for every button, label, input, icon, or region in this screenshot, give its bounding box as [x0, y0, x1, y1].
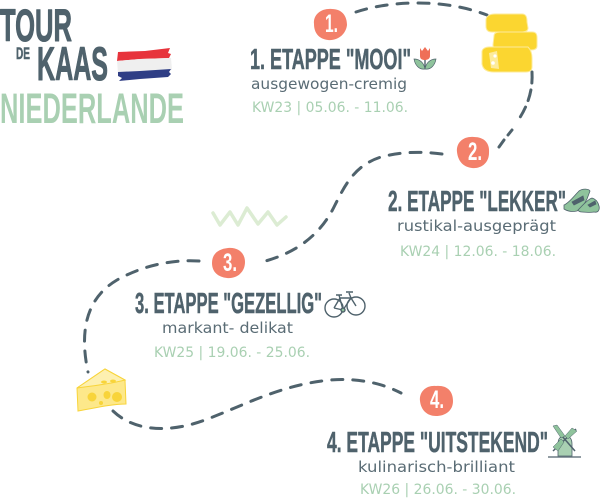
stage 3 text: [135, 288, 322, 361]
stage 4 text: KW26 | 26.06. - 30.06.: [360, 482, 516, 498]
title: Tour de Kaas Niederlande: TOUR: [0, 0, 72, 51]
stage 2 marker: 2.: [468, 138, 482, 166]
icon: windmill: [548, 425, 581, 457]
stage 2 marker: [457, 137, 489, 168]
stage 3 text: KW25 | 19.06. - 25.06.: [154, 345, 310, 361]
title: Tour de Kaas Niederlande: [0, 0, 184, 133]
stage 3 text: markant- delikat: [162, 319, 293, 337]
stage 1 text: [250, 44, 411, 116]
icon: tulip: [414, 47, 436, 69]
stage 4 text: kulinarisch-brilliant: [358, 458, 515, 476]
stage 4 marker: 4.: [430, 386, 444, 414]
stage 3 marker: [212, 248, 245, 278]
icon: bicycle: [325, 292, 365, 317]
icon: cheese wheels stack: [482, 14, 537, 72]
stage 2 text: [388, 186, 566, 260]
stage 2 text: rustikal-ausgeprägt: [397, 217, 556, 235]
stage 3 marker: 3.: [223, 249, 237, 277]
title: Tour de Kaas Niederlande: NIEDERLANDE: [0, 85, 184, 133]
route: dashed path: [85, 3, 532, 429]
stage 4 marker: [420, 386, 453, 416]
stage 1 text: 1. ETAPPE "MOOI": [250, 44, 411, 76]
decoration: green zigzag: [213, 208, 286, 225]
icon: clogs: [564, 189, 599, 212]
icon: Dutch flag: [117, 48, 172, 81]
stage 4 text: [327, 427, 548, 498]
stage 3 text: 3. ETAPPE "GEZELLIG": [135, 288, 322, 320]
stage 2 text: KW24 | 12.06. - 18.06.: [400, 244, 556, 260]
title: Tour de Kaas Niederlande: DE: [16, 44, 30, 63]
stage 1 marker: [314, 9, 347, 40]
stage 1 text: KW23 | 05.06. - 11.06.: [252, 100, 408, 116]
title: Tour de Kaas Niederlande: KAAS: [37, 37, 108, 90]
stage 1 text: ausgewogen-cremig: [251, 75, 407, 93]
icon: cheese wedge: [77, 369, 126, 411]
stage 1 marker: 1.: [325, 10, 338, 38]
